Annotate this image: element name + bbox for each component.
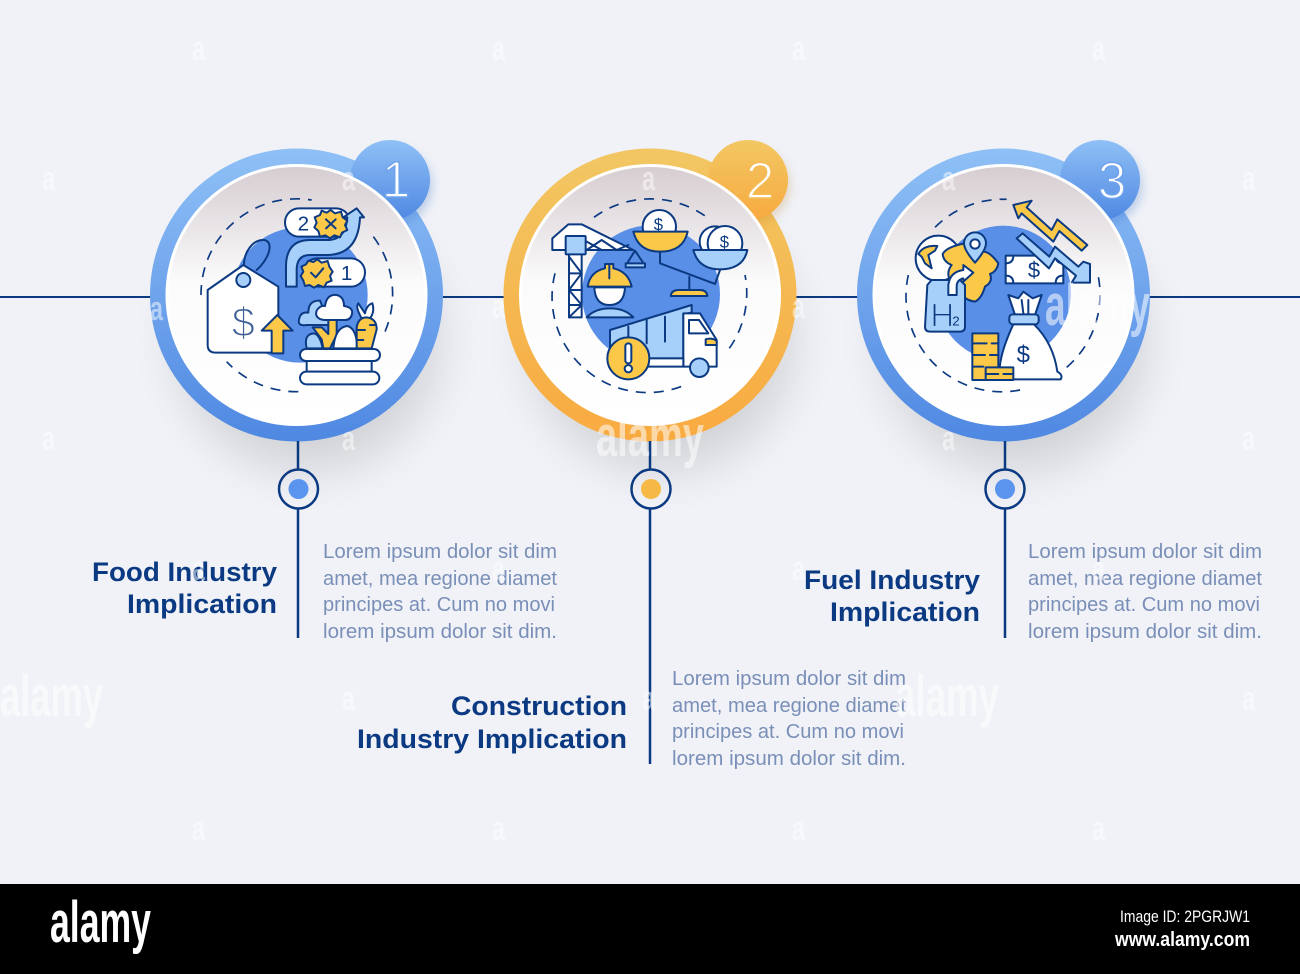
watermarks: a (1092, 810, 1106, 848)
watermarks: a (942, 160, 956, 198)
watermarks: a (942, 420, 956, 458)
alamy logo: alamy (50, 890, 151, 955)
watermarks: a (492, 810, 506, 848)
column 1: body text (323, 541, 557, 643)
watermarks: a (792, 550, 806, 588)
icon: price tag, groceries, priority: 1 (341, 262, 352, 285)
column 2: body text: lorem ipsum dolor sit dim. (672, 748, 906, 770)
watermarks: a (1242, 680, 1256, 718)
watermarks: alamy (0, 664, 103, 729)
column 1: heading: Food Industry (92, 557, 277, 587)
watermarks: a (42, 160, 56, 198)
number badge 2 (708, 140, 788, 220)
watermarks: a (1242, 160, 1256, 198)
column 3: heading: Fuel Industry (804, 565, 980, 595)
watermarks: alamy (596, 404, 704, 469)
column 1: heading: Implication (127, 589, 277, 619)
icon: crane, worker, scales, truck (552, 199, 747, 393)
ring 3 (857, 148, 1150, 442)
icon: globe, hydrogen, arrows, money bag: 2 (952, 314, 960, 329)
inner disc 2 (522, 167, 778, 423)
icon: globe, hydrogen, arrows, money bag: $ (1017, 342, 1030, 369)
inner disc 1 (168, 167, 424, 423)
watermarks: a (642, 160, 656, 198)
watermarks: a (1092, 550, 1106, 588)
column 3: body text: Lorem ipsum dolor sit dim (1028, 541, 1262, 563)
column 3: connector and marker (986, 441, 1024, 638)
number badge 2: 2 (746, 152, 774, 209)
watermarks: a (642, 680, 656, 718)
panel: fuel industry circle (857, 140, 1150, 470)
watermarks: a (192, 30, 206, 68)
number badge 1: 1 (382, 151, 410, 208)
watermarks: a (150, 290, 164, 328)
watermarks: a (492, 550, 506, 588)
column 1: body text: principes at. Cum no movi (323, 594, 555, 616)
icon: globe, hydrogen, arrows, money bag: $ (1028, 257, 1040, 282)
icon: globe, hydrogen, arrows, money bag (906, 199, 1100, 392)
watermarks: alamy (895, 664, 999, 729)
column 1: heading (92, 557, 277, 619)
column 3: heading: Implication (830, 597, 980, 627)
watermarks: a (192, 550, 206, 588)
column 3: body text: principes at. Cum no movi (1028, 594, 1260, 616)
number badge 3: 3 (1098, 152, 1126, 209)
horizontal connector line (0, 296, 1300, 298)
watermarks: a (1092, 30, 1106, 68)
icon: price tag, groceries, priority: $ (232, 299, 255, 346)
column 3: body text (1028, 541, 1262, 643)
column 2: body text (672, 668, 906, 770)
panel: food industry circle (150, 140, 443, 470)
column 2: heading: Construction (451, 691, 627, 721)
column 3: body text: lorem ipsum dolor sit dim. (1028, 621, 1262, 643)
column 2: heading (357, 691, 627, 754)
icon: price tag, groceries, priority: 2 (298, 213, 309, 236)
column 2: heading: Industry Implication (357, 724, 627, 754)
column 3: body text: amet, mea regione diamet (1028, 568, 1262, 590)
image id and url: Image ID: 2PGRJW1 (1120, 907, 1250, 926)
column 2: body text: amet, mea regione diamet (672, 695, 906, 717)
icon: crane, worker, scales, truck: $ (654, 215, 663, 234)
watermarks: alamy (1045, 273, 1150, 338)
watermarks: a (792, 810, 806, 848)
ring 1 (150, 148, 443, 442)
image id and url: www.alamy.com (1114, 929, 1250, 951)
watermarks: a (792, 288, 806, 326)
watermarks: a (42, 420, 56, 458)
icon: globe, hydrogen, arrows, money bag: H (930, 298, 954, 335)
watermarks: a (342, 420, 356, 458)
column 1: body text: lorem ipsum dolor sit dim. (323, 621, 557, 643)
column 2: body text: principes at. Cum no movi (672, 721, 904, 743)
column 3: heading (804, 565, 980, 627)
watermarks: a (192, 810, 206, 848)
image id and url (1114, 907, 1250, 951)
panel: construction industry circle (504, 140, 796, 470)
column 1: body text: Lorem ipsum dolor sit dim (323, 541, 557, 563)
column 1: body text: amet, mea regione diamet (323, 568, 557, 590)
footer bar (0, 884, 1300, 974)
column 1: connector and marker (279, 441, 318, 638)
inner disc 3 (876, 167, 1132, 423)
number badge 3 (1060, 140, 1140, 220)
watermarks: a (1242, 420, 1256, 458)
watermarks: a (342, 160, 356, 198)
watermarks: a (492, 30, 506, 68)
watermarks: a (342, 680, 356, 718)
ring 2 (504, 148, 796, 442)
number badge 1 (350, 140, 430, 220)
column 2: body text: Lorem ipsum dolor sit dim (672, 668, 906, 690)
watermarks: a (792, 30, 806, 68)
icon: crane, worker, scales, truck: $ (720, 232, 729, 251)
icon: price tag, groceries, priority (201, 199, 393, 392)
watermarks: a (492, 288, 506, 326)
column 2: connector and marker (632, 441, 670, 764)
